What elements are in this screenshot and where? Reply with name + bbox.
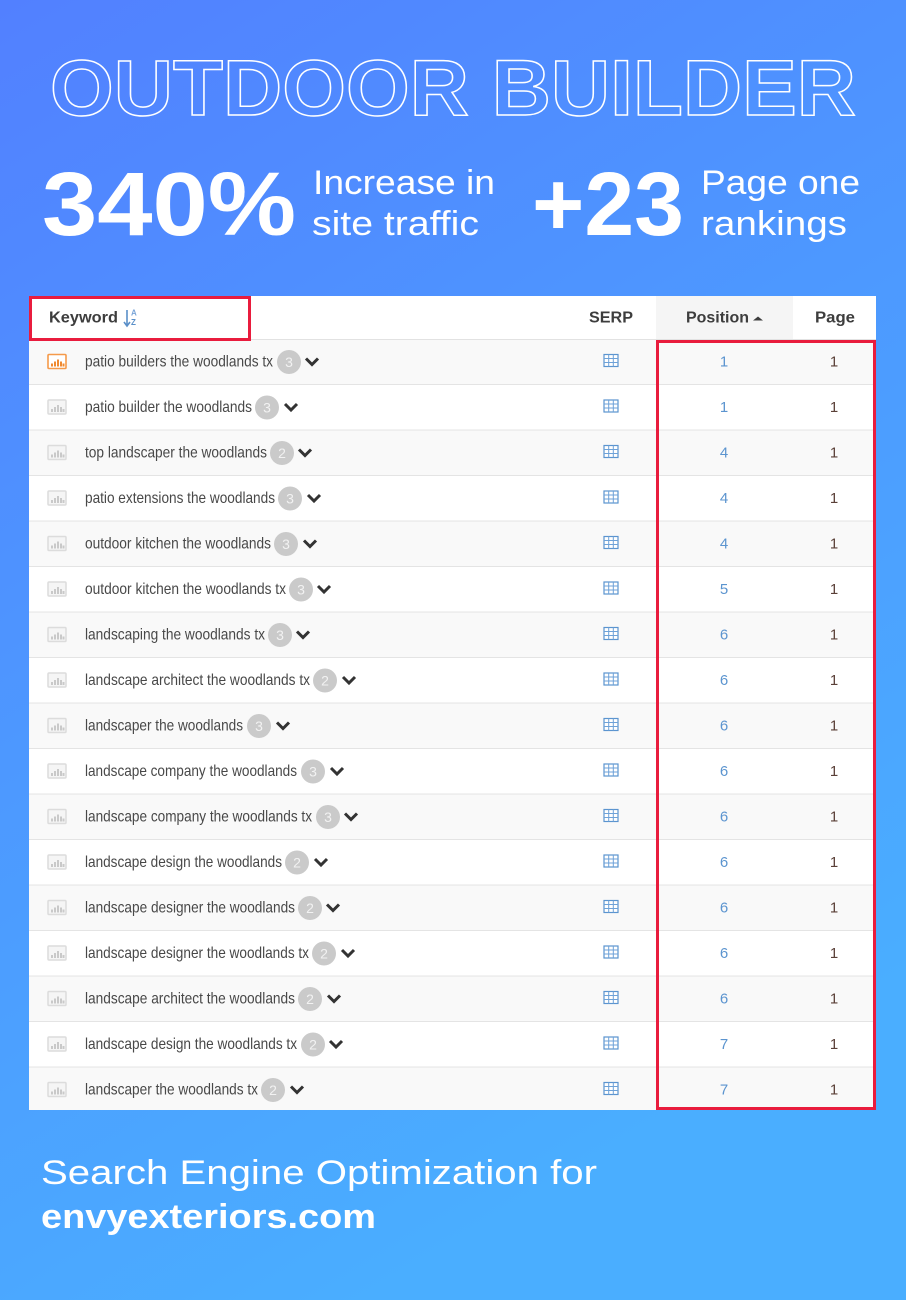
row 5: 4 — [720, 536, 728, 552]
row 14: 1 — [830, 945, 838, 962]
row 2: 3 — [263, 400, 271, 416]
header: SERP: SERP — [589, 310, 633, 326]
row 17: 1 — [830, 1082, 838, 1098]
title: OUTDOOR BUILDER — [50, 43, 856, 132]
row 16: 1 — [830, 1036, 838, 1053]
row 15: 2 — [306, 991, 314, 1007]
row 8: 1 — [830, 672, 838, 689]
footer text — [41, 1154, 597, 1236]
row 6: 1 — [830, 581, 838, 598]
row 16: 2 — [309, 1036, 317, 1052]
row 7: landscaping the woodlands tx — [85, 626, 265, 644]
stat number 340%: 340% — [42, 155, 296, 255]
row 17 — [29, 1068, 876, 1110]
footer line 1: Search Engine Optimization for — [41, 1154, 597, 1192]
row 8: 6 — [720, 672, 728, 689]
panel: keyword rankings table — [29, 296, 876, 1110]
row 1: patio builders the woodlands tx — [85, 354, 273, 370]
row 5: 1 — [830, 536, 838, 552]
row 2: 1 — [830, 399, 838, 416]
row 6 — [29, 567, 876, 612]
stat label: site traffic — [312, 205, 479, 243]
row 17: 2 — [269, 1082, 277, 1098]
row 13: 6 — [720, 900, 728, 916]
footer line 2: website: envyexteriors.com — [41, 1198, 376, 1236]
row 6: 3 — [297, 582, 305, 598]
stat label: rankings — [701, 205, 847, 243]
row 13: 1 — [830, 900, 838, 916]
row 13 — [29, 886, 876, 931]
row 4: patio extensions the woodlands — [85, 490, 275, 507]
stat: page one rankings — [532, 155, 860, 255]
header: Keyword: Keyword — [49, 310, 118, 326]
row 10: 6 — [720, 763, 728, 780]
row 6: 5 — [720, 581, 728, 598]
header: Position: Position — [686, 310, 749, 326]
row 9: 1 — [830, 718, 838, 734]
row 9 — [29, 704, 876, 749]
row 3: 2 — [278, 445, 286, 461]
row 7: 3 — [276, 627, 284, 643]
row 9: 3 — [255, 718, 263, 734]
row 7: 6 — [720, 626, 728, 644]
row 7: 1 — [830, 626, 838, 644]
row 12 — [29, 840, 876, 886]
row 17: landscaper the woodlands tx — [85, 1082, 258, 1098]
row 1: 1 — [830, 354, 838, 370]
row 11: 6 — [720, 808, 728, 826]
row 9: landscaper the woodlands — [85, 718, 243, 734]
row 6: outdoor kitchen the woodlands tx — [85, 581, 286, 598]
row 15: 1 — [830, 990, 838, 1008]
icon: sort A-Z — [124, 308, 137, 327]
row 16: landscape design the woodlands tx — [85, 1036, 297, 1053]
row 17: 7 — [720, 1082, 728, 1098]
table header — [29, 296, 876, 340]
row 12: 2 — [293, 854, 301, 870]
row 2: 1 — [720, 399, 728, 416]
stat number +23: +23 — [532, 155, 684, 255]
row 10: landscape company the woodlands — [85, 763, 297, 780]
row 8 — [29, 658, 876, 704]
row 12: 6 — [720, 854, 728, 871]
row 11: 1 — [830, 808, 838, 826]
row 1 — [29, 340, 876, 385]
callout: keyword highlight box — [30, 298, 250, 340]
row 16 — [29, 1022, 876, 1068]
row 13: 2 — [306, 900, 314, 916]
row 11: landscape company the woodlands tx — [85, 808, 312, 826]
row 5 — [29, 522, 876, 567]
row 5: 3 — [282, 536, 290, 552]
row 16: 7 — [720, 1036, 728, 1053]
row 5: outdoor kitchen the woodlands — [85, 536, 271, 552]
row 12: landscape design the woodlands — [85, 854, 282, 871]
header: Page: Page — [815, 310, 855, 326]
row 14: landscape designer the woodlands tx — [85, 945, 309, 962]
row 13: landscape designer the woodlands — [85, 900, 295, 916]
row 4 — [29, 476, 876, 522]
icon: sort A-Z: Z — [131, 318, 136, 327]
row 7 — [29, 612, 876, 658]
stat: site traffic — [42, 155, 495, 255]
row 15: landscape architect the woodlands — [85, 990, 295, 1008]
row 15 — [29, 976, 876, 1022]
stat label: Increase in — [313, 164, 495, 202]
row 11: 3 — [324, 809, 332, 825]
row 2: patio builder the woodlands — [85, 399, 252, 416]
row 1: 3 — [285, 354, 293, 370]
row 2 — [29, 385, 876, 430]
row 10 — [29, 749, 876, 794]
stat label: Page one — [701, 164, 860, 202]
row 10: 1 — [830, 763, 838, 780]
row 11 — [29, 794, 876, 840]
icon: sort A-Z: A — [131, 308, 137, 318]
row 14 — [29, 931, 876, 976]
row 4: 1 — [830, 490, 838, 507]
row 4: 3 — [286, 490, 294, 506]
row 14: 2 — [320, 946, 328, 962]
row 8: landscape architect the woodlands tx — [85, 672, 310, 689]
row 9: 6 — [720, 718, 728, 734]
row 3: top landscaper the woodlands — [85, 444, 267, 462]
row 15: 6 — [720, 990, 728, 1008]
callout: position and page highlight box — [658, 342, 874, 1108]
row 10: 3 — [309, 764, 317, 780]
row 14: 6 — [720, 945, 728, 962]
row 3 — [29, 430, 876, 476]
row 3: 1 — [830, 444, 838, 462]
row 12: 1 — [830, 854, 838, 871]
icon: orange chart — [48, 354, 66, 368]
row 3: 4 — [720, 444, 728, 462]
row 8: 2 — [321, 672, 329, 688]
row 1: 1 — [720, 354, 728, 370]
row 4: 4 — [720, 490, 728, 507]
